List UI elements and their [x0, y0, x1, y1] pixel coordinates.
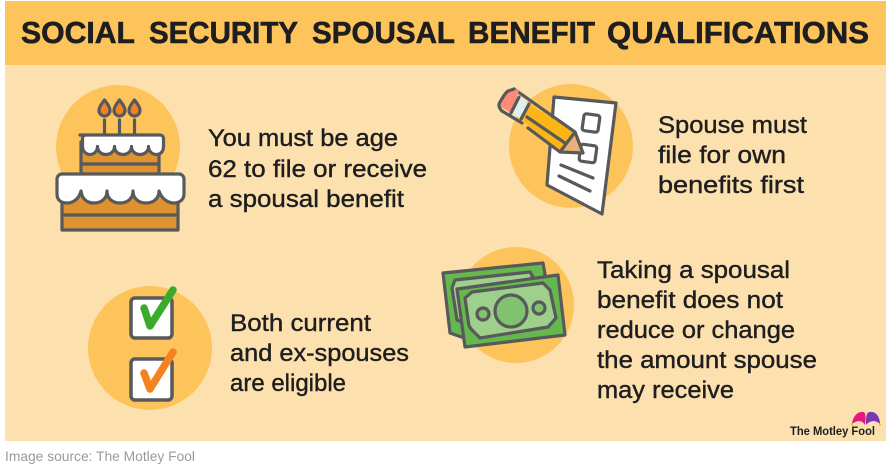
text: age requirement: 62 to file or receive	[208, 156, 427, 183]
text: age requirement	[208, 125, 427, 213]
text: no reduction	[597, 257, 817, 404]
logo: The Motley Fool	[790, 412, 881, 438]
text: no reduction: reduce or change	[597, 317, 795, 344]
title: SECURITY	[149, 15, 298, 50]
text: eligibility: Both current	[230, 310, 371, 337]
text: no reduction: Taking a spousal	[597, 257, 790, 284]
title: QUALIFICATIONS	[607, 15, 869, 50]
text: file for own benefits	[658, 112, 807, 199]
text: no reduction: may receive	[597, 377, 734, 404]
text: file for own benefits: Spouse must	[658, 112, 807, 139]
header band	[5, 1, 886, 65]
text: no reduction: benefit does not	[597, 287, 783, 314]
text: eligibility: are eligible	[230, 370, 346, 397]
text: file for own benefits: file for own	[658, 142, 786, 169]
icon: check boxes	[88, 286, 212, 410]
icon: pencil and form	[499, 84, 633, 214]
text: age requirement: You must be age	[208, 125, 398, 152]
text: eligibility: and ex-spouses	[230, 340, 409, 367]
text: eligibility	[230, 310, 409, 397]
text: file for own benefits: benefits first	[658, 172, 804, 199]
title: SOCIAL	[21, 15, 135, 50]
title	[21, 15, 869, 50]
text: no reduction: the amount spouse	[597, 347, 817, 374]
logo: The Motley Fool: The Motley Fool	[790, 424, 875, 438]
title: SPOUSAL	[312, 15, 455, 50]
image source caption: Image source: The Motley Fool	[5, 448, 195, 464]
icon: cash bills	[443, 247, 574, 363]
text: age requirement: a spousal benefit	[208, 186, 404, 213]
title: BENEFIT	[468, 15, 595, 50]
icon: birthday cake	[56, 85, 184, 230]
